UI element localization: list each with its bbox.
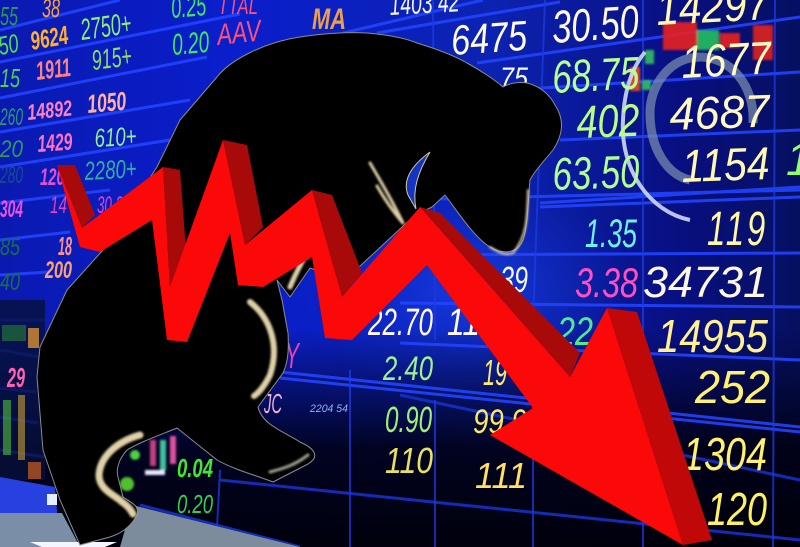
right ticker numbers (367, 0, 800, 535)
right ticker numbers: 402 (576, 94, 640, 148)
left ticker numbers: 915+ (90, 40, 133, 76)
red falling arrow (57, 140, 712, 545)
right ticker numbers: 22 (556, 310, 593, 354)
left ticker numbers: 304 (0, 196, 23, 223)
left ticker numbers: 14892 (26, 95, 74, 125)
right ticker numbers: 22.70 (367, 302, 433, 344)
left dark columns (0, 300, 45, 480)
right ticker numbers: 99.9 (473, 403, 527, 441)
left ticker numbers: 0.20 (171, 26, 211, 62)
bear silhouette (37, 33, 562, 545)
left ticker numbers: 2204 54 (309, 403, 348, 415)
left ticker numbers: 85 (0, 234, 20, 261)
right ticker numbers: 68.75 (551, 46, 641, 103)
left ticker numbers: 18 (58, 231, 72, 261)
colour blobs by bear leg (120, 436, 176, 491)
right ticker numbers: 75 (500, 62, 528, 95)
right ticker numbers: 1304 (683, 428, 767, 480)
left ticker numbers: 0.20 (177, 489, 213, 519)
left ticker numbers: 30.2 (97, 192, 123, 219)
left ticker numbers: 9624 (28, 20, 71, 56)
left ticker numbers: 1200 (40, 164, 73, 191)
right ticker numbers: 3.38 (575, 259, 638, 306)
left ticker numbers: 260 (0, 104, 23, 131)
left ticker numbers: 2280+ (83, 153, 137, 186)
left ticker numbers: 15 (0, 63, 20, 93)
right ticker numbers: 0.90 (385, 399, 432, 440)
blue gap between arm and jaw (406, 152, 430, 209)
right ticker numbers: 19 (483, 352, 507, 393)
left ticker numbers: 610+ (94, 121, 137, 153)
right ticker numbers: 2.40 (382, 350, 433, 388)
right ticker numbers: 119 (707, 203, 768, 256)
right ticker numbers: 1154 (681, 137, 770, 192)
arrow side faces (57, 140, 580, 377)
left ticker numbers: 29 (6, 362, 25, 393)
right ticker numbers: 11 (447, 302, 480, 344)
left ticker numbers: 1429 (37, 129, 74, 158)
right ticker numbers: 1.35 (585, 212, 637, 256)
left ticker numbers: 2750+ (78, 7, 133, 47)
left ticker numbers: 200 (44, 257, 72, 284)
left ticker numbers: MA (312, 3, 346, 36)
right ticker numbers: 39 (500, 259, 528, 300)
left ticker numbers: 20 (0, 136, 24, 163)
left ticker numbers: 1050 (86, 86, 128, 119)
right ticker numbers: 63.50 (552, 145, 641, 200)
left ticker numbers: AAV (214, 14, 265, 52)
right ticker numbers: 1677 (680, 31, 774, 88)
bear fur highlights (99, 163, 528, 514)
left ticker numbers: 40 (0, 269, 20, 296)
left ticker numbers: 1911 (34, 52, 72, 86)
right ticker numbers: 120 (707, 483, 767, 535)
right ticker numbers: 4687 (669, 84, 772, 140)
right ticker numbers: 34731 (643, 258, 768, 307)
right ticker numbers: 14955 (657, 310, 768, 362)
circular HUD graphic (623, 22, 773, 220)
left ticker numbers (0, 0, 348, 519)
floor (0, 477, 60, 547)
arrow front face (57, 140, 683, 545)
left ticker numbers: 55 (0, 1, 18, 31)
left ticker numbers: 280 (0, 162, 23, 189)
left ticker numbers: 0.04 (177, 453, 213, 483)
right ticker numbers: 111 (475, 455, 527, 496)
left ticker numbers: Y (285, 335, 301, 376)
left ticker numbers: 14 (50, 192, 67, 219)
right ticker numbers: 6475 (449, 12, 529, 64)
left ticker numbers: JC (263, 388, 282, 419)
right ticker numbers: 252 (694, 361, 770, 413)
arrowhead side (607, 308, 712, 545)
right ticker numbers: 110 (385, 440, 433, 481)
